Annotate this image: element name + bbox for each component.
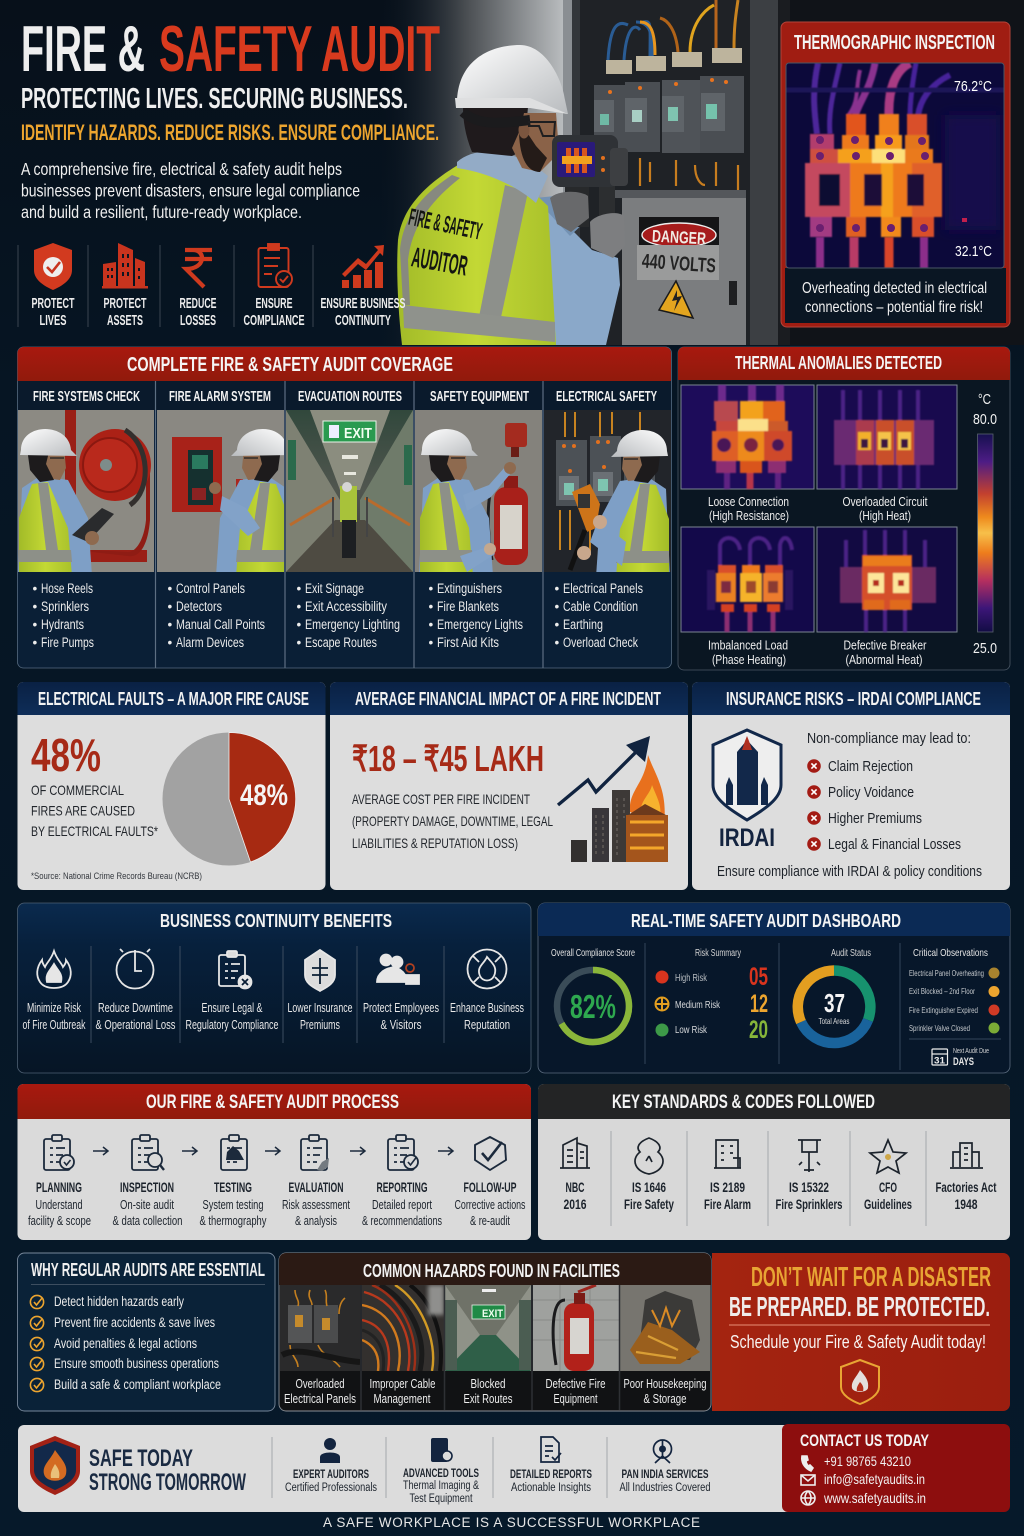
pie chart — [162, 732, 296, 866]
hazard captions: & Storage — [644, 1391, 686, 1406]
compliance gauge: Overall Compliance Score — [551, 948, 635, 959]
benefit labels: Enhance Business — [450, 1001, 524, 1015]
critical observations: Sprinkler Valve Closed — [909, 1024, 970, 1033]
icon: flame shield — [841, 1360, 879, 1404]
column dividers — [156, 381, 543, 668]
panel: business continuity benefits — [18, 903, 531, 1073]
critical observations: Critical Observations — [913, 947, 988, 959]
contact details: www.safetyaudits.in — [823, 1490, 926, 1506]
photo: defective extinguisher — [533, 1285, 619, 1371]
bullet lists: Detectors — [176, 599, 222, 614]
captions: Loose Connection — [708, 494, 789, 509]
risk summary: High Risk — [675, 973, 708, 984]
bullet lists: • — [428, 635, 434, 650]
cost description — [352, 791, 553, 851]
critical observations: Next Audit Due — [953, 1048, 989, 1055]
panel: safety audit dashboard — [538, 903, 1010, 1073]
reasons list — [30, 1294, 221, 1392]
bullet lists: Fire Pumps — [41, 635, 94, 650]
footer features: DETAILED REPORTS — [510, 1469, 592, 1481]
risk summary — [655, 948, 768, 1044]
risk list: Claim Rejection — [828, 759, 913, 775]
cost description: AVERAGE COST PER FIRE INCIDENT — [352, 791, 530, 807]
bullet lists: • — [554, 617, 560, 632]
captions: (High Resistance) — [709, 508, 789, 523]
critical observations: 31 — [934, 1056, 945, 1066]
process labels: Corrective actions — [454, 1198, 526, 1212]
intro paragraph: A comprehensive fire, electrical & safety audit helps — [21, 159, 342, 179]
cabinet door — [622, 198, 746, 345]
stat description — [31, 782, 158, 839]
panel: thermographic inspection — [781, 22, 1010, 327]
bullet lists: • — [32, 581, 38, 596]
thermal image: loose connection — [681, 385, 814, 489]
warning triangle — [659, 281, 693, 318]
contact icons — [801, 1456, 815, 1505]
critical observations: Exit Blocked – 2nd Floor — [909, 987, 975, 996]
auditor figure — [397, 45, 620, 345]
reasons list: Detect hidden hazards early — [54, 1294, 184, 1309]
bullet lists: Emergency Lights — [437, 617, 523, 632]
bullet lists: • — [32, 617, 38, 632]
compliance gauge: 82% — [570, 988, 616, 1025]
heading: ELECTRICAL FAULTS – A MAJOR FIRE CAUSE — [38, 689, 309, 709]
footer features: Thermal Imaging & — [403, 1480, 479, 1492]
bullet lists: Earthing — [563, 617, 603, 632]
bullet lists: • — [428, 599, 434, 614]
heading: AVERAGE FINANCIAL IMPACT OF A FIRE INCIDENT — [355, 689, 661, 709]
critical observations: Electrical Panel Overheating — [909, 969, 984, 978]
caption — [802, 280, 987, 316]
hero labels: REDUCE — [180, 295, 216, 312]
panel: call to action — [712, 1253, 1010, 1411]
captions: Overloaded Circuit — [842, 494, 928, 509]
icon: rupee — [185, 250, 212, 287]
benefit labels: Protect Employees — [363, 1001, 439, 1015]
thermal image: overloaded circuit — [817, 385, 957, 489]
bullet lists: Exit Signage — [305, 581, 364, 596]
standards labels: Fire Safety — [624, 1196, 674, 1212]
bullet lists: Hose Reels — [41, 581, 93, 596]
bullet lists: • — [554, 635, 560, 650]
bullet lists: • — [296, 635, 302, 650]
icon: IRDAI shield — [713, 730, 781, 820]
pie chart: 48% — [240, 779, 288, 812]
bullet lists: • — [296, 581, 302, 596]
process labels: INSPECTION — [120, 1179, 174, 1195]
photo: blocked exits — [445, 1285, 531, 1371]
bullet lists: • — [168, 617, 172, 632]
footer icons — [320, 1437, 672, 1463]
standards labels: Guidelines — [864, 1196, 912, 1212]
standards labels: IS 1646 — [632, 1179, 666, 1195]
icons: benefits — [37, 949, 506, 991]
risk list: Non-compliance may lead to: — [807, 731, 971, 747]
column headings: SAFETY EQUIPMENT — [430, 388, 529, 405]
hero photo: auditor at electrical panel — [380, 0, 1024, 345]
panel: thermal anomalies detected — [678, 347, 1010, 670]
risk list — [807, 731, 971, 853]
hero labels: LOSSES — [180, 312, 216, 329]
heading: BUSINESS CONTINUITY BENEFITS — [160, 910, 392, 931]
risk summary: Medium Risk — [675, 1000, 721, 1011]
risk summary: Risk Summary — [695, 948, 741, 959]
bullet lists: • — [168, 599, 172, 614]
IRDAI label: IRDAI — [719, 824, 775, 852]
title — [21, 12, 440, 85]
benefit labels: Ensure Legal & — [202, 1001, 263, 1015]
footer features: Certified Professionals — [285, 1482, 377, 1494]
bullet lists: Manual Call Points — [176, 617, 265, 632]
photo: safety equipment — [415, 410, 542, 576]
audit status donut: Total Areas — [818, 1016, 850, 1026]
hazard captions: Electrical Panels — [284, 1391, 356, 1406]
reasons list: Prevent fire accidents & save lives — [54, 1315, 215, 1330]
hero labels: ENSURE — [256, 295, 292, 312]
hero photo: auditor at electrical panel: FIRE & SAFETY — [406, 204, 484, 246]
stat description: FIRES ARE CAUSED — [31, 802, 135, 818]
temperature scale: 25.0 — [973, 640, 997, 657]
bullet lists: Hydrants — [41, 617, 84, 632]
exit sign small: EXIT — [482, 1308, 503, 1320]
subtitle: PROTECTING LIVES. SECURING BUSINESS. — [21, 83, 408, 115]
hazard captions: Defective Fire — [546, 1376, 606, 1391]
bullet lists: • — [32, 635, 38, 650]
contact details — [823, 1453, 926, 1506]
bullet lists: • — [168, 581, 172, 596]
bullet lists: • — [554, 581, 560, 596]
vest lettering: AUDITOR — [409, 241, 470, 282]
hero labels: LIVES — [40, 312, 66, 329]
big stat: 48% — [31, 729, 101, 781]
panel: audit process — [18, 1084, 531, 1240]
bullet lists: Emergency Lighting — [305, 617, 400, 632]
process labels — [28, 1179, 526, 1228]
panel: financial impact — [330, 682, 688, 890]
photo: evacuation corridor — [286, 410, 413, 572]
thermal camera — [552, 135, 628, 227]
process labels: & data collection — [112, 1214, 183, 1228]
temperature readouts: 76.2°C — [954, 78, 992, 95]
benefit labels: Reputation — [464, 1018, 510, 1032]
standards labels — [564, 1179, 997, 1212]
benefit labels: & Visitors — [380, 1018, 422, 1032]
panel: electrical faults — [18, 682, 326, 890]
process labels: & recommendations — [362, 1214, 442, 1228]
standards labels: NBC — [566, 1179, 584, 1195]
risk summary: 12 — [750, 990, 768, 1018]
hazard captions — [284, 1376, 706, 1406]
panel: insurance risks — [692, 682, 1010, 890]
hero labels: COMPLIANCE — [244, 312, 304, 329]
process labels: On-site audit — [120, 1198, 174, 1212]
captions: Defective Breaker — [844, 638, 927, 652]
benefit labels: Reduce Downtime — [98, 1001, 173, 1015]
icon: burning buildings and rising arrow — [558, 736, 668, 862]
heading: REAL-TIME SAFETY AUDIT DASHBOARD — [631, 910, 901, 931]
column headings: FIRE ALARM SYSTEM — [169, 388, 271, 405]
risk summary: Low Risk — [675, 1025, 708, 1036]
process labels: Detailed report — [372, 1198, 432, 1212]
panel: thermographic inspection: 32.1°C — [955, 243, 992, 260]
column headings: EVACUATION ROUTES — [298, 388, 402, 405]
audit status donut — [798, 948, 871, 1043]
benefit labels: & Operational Loss — [96, 1018, 176, 1032]
footer features: Test Equipment — [410, 1493, 473, 1505]
process arrows — [93, 1147, 453, 1155]
exit sign — [323, 421, 376, 442]
audit status donut: 37 — [824, 988, 845, 1018]
benefit labels: Lower Insurance — [288, 1001, 353, 1015]
process labels: EVALUATION — [288, 1179, 344, 1195]
bullet lists: • — [554, 599, 560, 614]
temperature scale: 80.0 — [973, 411, 997, 428]
title: SAFETY AUDIT — [159, 12, 440, 85]
footer slogan: SAFE TODAY — [89, 1445, 193, 1472]
footer slogan — [89, 1445, 246, 1496]
icon: compliance clipboard — [258, 244, 292, 287]
bullet lists: Exit Accessibility — [305, 599, 387, 614]
panel: standards and codes — [538, 1084, 1010, 1240]
panel: why regular audits — [18, 1253, 275, 1411]
stat description: BY ELECTRICAL FAULTS* — [31, 823, 158, 839]
bullet lists: First Aid Kits — [437, 635, 499, 650]
footer features: PAN INDIA SERVICES — [622, 1469, 709, 1481]
hazard captions: Management — [374, 1391, 431, 1406]
process labels: & thermography — [200, 1214, 267, 1228]
benefit labels: Minimize Risk — [27, 1001, 82, 1015]
photo: fire systems check — [18, 410, 154, 576]
temperature scale — [973, 391, 997, 657]
standards labels: 1948 — [954, 1196, 978, 1212]
process labels: FOLLOW-UP — [464, 1179, 516, 1195]
bullet lists — [32, 581, 643, 650]
footer features: Actionable Insights — [511, 1482, 591, 1494]
process labels: PLANNING — [36, 1179, 82, 1195]
bullet lists: Overload Check — [563, 635, 638, 650]
bullet lists: Extinguishers — [437, 581, 502, 596]
risk list: Policy Voidance — [828, 785, 914, 801]
cost description: LIABILITIES & REPUTATION LOSS) — [352, 835, 518, 851]
bullet lists: Control Panels — [176, 581, 245, 596]
heading: WHY REGULAR AUDITS ARE ESSENTIAL — [31, 1260, 265, 1280]
thermal image: defective breaker — [817, 527, 957, 632]
source note: *Source: National Crime Records Bureau (NCRB) — [31, 871, 202, 882]
bullet lists: • — [296, 617, 302, 632]
hero labels: CONTINUITY — [335, 312, 391, 329]
captions: Imbalanced Load — [708, 638, 788, 652]
photo: electrical safety — [544, 410, 671, 577]
contact heading: CONTACT US TODAY — [800, 1431, 929, 1450]
bullet lists: Escape Routes — [305, 635, 377, 650]
breaker modules — [594, 48, 744, 153]
intro paragraph: and build a resilient, future-ready workplace. — [21, 202, 302, 222]
benefit labels: Premiums — [300, 1018, 340, 1032]
hero labels: ENSURE BUSINESS — [320, 295, 406, 312]
hero labels: ASSETS — [107, 312, 143, 329]
reasons list: Avoid penalties & legal actions — [54, 1336, 197, 1351]
process labels: System testing — [202, 1198, 264, 1212]
heading: KEY STANDARDS & CODES FOLLOWED — [612, 1092, 875, 1113]
volts sign text: 440 VOLTS — [641, 250, 717, 278]
icon: emblem shield — [30, 1436, 80, 1495]
process labels: & re-audit — [470, 1214, 510, 1228]
risk list: Higher Premiums — [828, 811, 922, 827]
bullet lists: • — [32, 599, 38, 614]
bullet lists: • — [428, 617, 434, 632]
photo: improper cables — [362, 1285, 444, 1371]
process labels: Understand — [36, 1198, 83, 1212]
bullet lists: • — [168, 635, 172, 650]
contact details: info@safetyaudits.in — [824, 1471, 925, 1487]
cost range: ₹18 – ₹45 LAKH — [352, 738, 544, 779]
standards labels: CFO — [879, 1179, 897, 1195]
risk summary: 05 — [749, 963, 768, 991]
tagline: IDENTIFY HAZARDS. REDUCE RISKS. ENSURE COMPLIANCE. — [21, 120, 439, 145]
hazard captions: Poor Housekeeping — [624, 1376, 706, 1391]
exit sign: EXIT — [344, 425, 372, 442]
bullet lists: • — [428, 581, 434, 596]
vest lettering — [406, 204, 484, 282]
footer tagline: A SAFE WORKPLACE IS A SUCCESSFUL WORKPLACE — [323, 1515, 700, 1530]
photo: poor housekeeping — [620, 1285, 710, 1371]
caption dividers — [361, 1285, 620, 1410]
captions — [708, 494, 928, 667]
footer slogan: STRONG TOMORROW — [89, 1469, 246, 1496]
heading: COMMON HAZARDS FOUND IN FACILITIES — [363, 1261, 620, 1281]
process labels: TESTING — [214, 1179, 252, 1195]
panel: common hazards — [279, 1253, 711, 1411]
hero labels — [32, 295, 406, 329]
critical observations: DAYS — [953, 1056, 974, 1068]
captions: (High Heat) — [859, 508, 911, 523]
caption: connections – potential fire risk! — [805, 299, 983, 316]
footer features: ADVANCED TOOLS — [403, 1468, 479, 1480]
panel: footer strip — [18, 1425, 798, 1512]
process labels: Risk assessment — [282, 1198, 350, 1212]
process labels: REPORTING — [376, 1179, 428, 1195]
standards labels: 2016 — [564, 1196, 587, 1212]
process labels: facility & scope — [28, 1214, 91, 1228]
hero benefit icons row — [18, 243, 406, 329]
hazard captions: Exit Routes — [464, 1391, 513, 1406]
captions: (Phase Heating) — [712, 652, 786, 667]
hazard captions: Overloaded — [296, 1376, 344, 1391]
risk summary: 20 — [749, 1016, 768, 1044]
thermal image — [786, 63, 1004, 268]
thermal image: imbalanced load — [681, 527, 814, 632]
hazard captions: Blocked — [470, 1376, 506, 1391]
heading: OUR FIRE & SAFETY AUDIT PROCESS — [146, 1092, 399, 1113]
bullet lists: Fire Blankets — [437, 599, 499, 614]
intro paragraph — [21, 159, 360, 222]
bullet lists: Alarm Devices — [176, 635, 244, 650]
footer features: All Industries Covered — [620, 1482, 710, 1494]
photo: overloaded panels — [280, 1285, 360, 1371]
icon: shield — [34, 243, 72, 290]
title: FIRE & — [21, 12, 145, 85]
reasons list: Ensure smooth business operations — [54, 1356, 219, 1371]
intro paragraph: businesses prevent disasters, ensure legal compliance — [21, 180, 360, 200]
photo: fire alarm system — [157, 410, 290, 576]
standards labels: IS 15322 — [789, 1179, 829, 1195]
icon: buildings — [102, 243, 148, 288]
standards labels: Fire Sprinklers — [776, 1196, 843, 1212]
critical observations: Fire Extinguisher Expired — [909, 1006, 978, 1015]
temperature scale: °C — [978, 391, 991, 408]
standards labels: Fire Alarm — [704, 1196, 751, 1212]
footer features — [285, 1468, 710, 1505]
benefit labels: of Fire Outbreak — [22, 1018, 86, 1032]
bullet lists: Sprinklers — [41, 599, 89, 614]
critical observations — [909, 947, 1000, 1068]
audit status donut: Audit Status — [831, 948, 871, 959]
captions: (Abnormal Heat) — [846, 652, 922, 667]
hero labels: PROTECT — [104, 295, 146, 312]
column headings: FIRE SYSTEMS CHECK — [33, 388, 140, 405]
column headings: ELECTRICAL SAFETY — [556, 388, 657, 405]
bullet lists: • — [296, 599, 302, 614]
danger sign text: DANGER — [652, 227, 706, 248]
icon: growth chart — [342, 245, 384, 288]
standards labels: Factories Act — [936, 1179, 997, 1195]
cost description: (PROPERTY DAMAGE, DOWNTIME, LEGAL — [352, 813, 553, 829]
hazard captions: Equipment — [554, 1391, 598, 1406]
benefit labels: Regulatory Compliance — [186, 1018, 279, 1032]
compliance gauge — [551, 948, 635, 1042]
footer features: EXPERT AUDITORS — [293, 1469, 369, 1481]
gloves — [550, 192, 625, 258]
process labels: & analysis — [295, 1214, 337, 1228]
panel: contact — [782, 1424, 1010, 1512]
heading: COMPLETE FIRE & SAFETY AUDIT COVERAGE — [127, 353, 453, 376]
wires above breakers — [608, 0, 738, 60]
standards labels: IS 2189 — [710, 1179, 745, 1195]
process icons — [44, 1135, 506, 1171]
bullet lists: Electrical Panels — [563, 581, 643, 596]
standards icons — [560, 1138, 983, 1174]
stat description: OF COMMERCIAL — [31, 782, 124, 798]
reasons list: Build a safe & compliant workplace — [54, 1377, 221, 1392]
bullet lists: Cable Condition — [563, 599, 638, 614]
contact details: +91 98765 43210 — [824, 1453, 911, 1469]
hazard captions: Improper Cable — [370, 1376, 436, 1391]
column headings — [33, 388, 657, 405]
panel: complete audit coverage — [18, 347, 672, 668]
hero labels: PROTECT — [32, 295, 74, 312]
risk list: Legal & Financial Losses — [828, 837, 961, 853]
benefit labels — [22, 1001, 524, 1032]
